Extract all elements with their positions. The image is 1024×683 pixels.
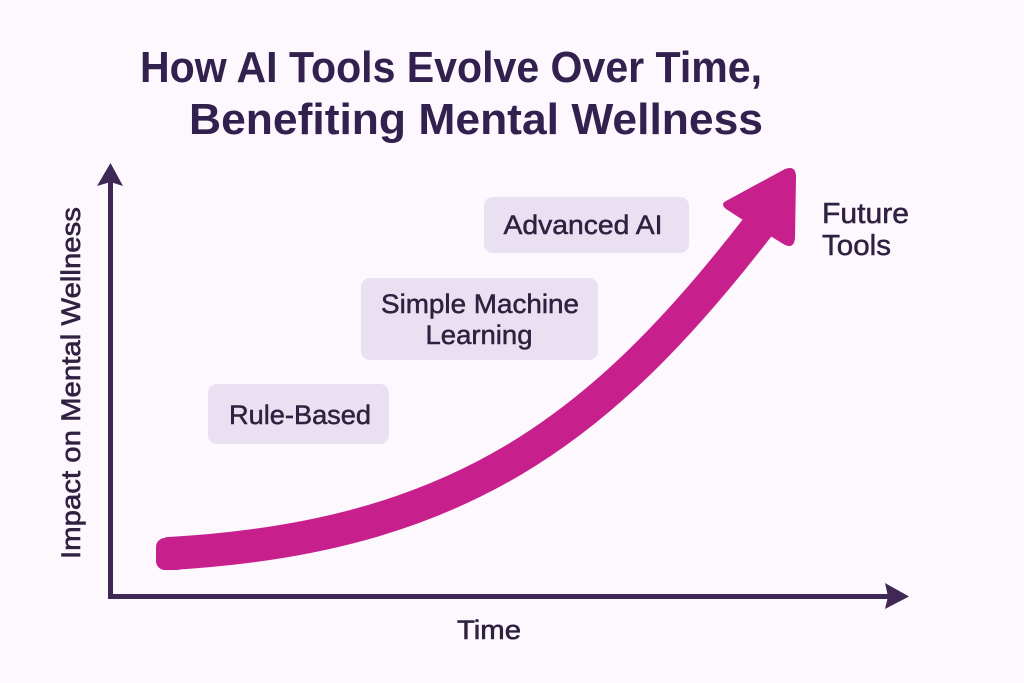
y axis label: Impact on Mental Wellness [56,207,86,559]
label: future tools: Tools [822,230,891,262]
growth curve arrow [156,168,796,570]
label: advanced AI: Advanced AI [504,210,662,240]
label: simple machine learning: Learning [426,320,532,350]
x axis label: Time [457,615,521,645]
label: rule-based [208,384,389,444]
title: Benefiting Mental Wellness [189,95,763,144]
label: simple machine learning: Simple Machine [381,289,579,319]
label: future tools: Future [822,198,909,230]
label: future tools [822,198,909,262]
label: advanced AI [484,197,689,253]
title: How AI Tools Evolve Over Time, [140,43,762,92]
title [140,43,763,144]
label: simple machine learning [361,278,598,360]
y axis with arrowhead [97,163,123,599]
label: rule-based: Rule-Based [229,400,371,430]
x axis with arrowhead [108,583,909,609]
